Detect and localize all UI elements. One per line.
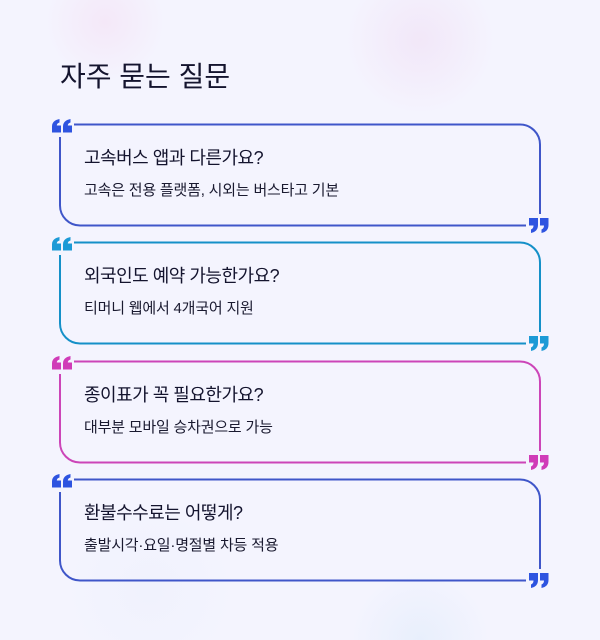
panel: FAQ 2 [52,237,548,351]
answer 2: 티머니 웹에서 4개국어 지원 [84,300,254,317]
panel: FAQ 1 [52,119,548,233]
title: 자주 묻는 질문 [60,60,230,92]
panel: FAQ 4 [52,474,548,588]
question 4: 환불수수료는 어떻게? [84,502,243,522]
panel: FAQ 3 [52,356,548,470]
answer 3: 대부분 모바일 승차권으로 가능 [84,418,273,436]
answer 4: 출발시각·요일·명절별 차등 적용 [84,536,278,554]
question 1: 고속버스 앱과 다른가요? [84,148,263,168]
question 3: 종이표가 꼭 필요한가요? [84,384,263,404]
answer 1: 고속은 전용 플랫폼, 시외는 버스타고 기본 [84,182,339,199]
question 2: 외국인도 예약 가능한가요? [84,266,279,286]
